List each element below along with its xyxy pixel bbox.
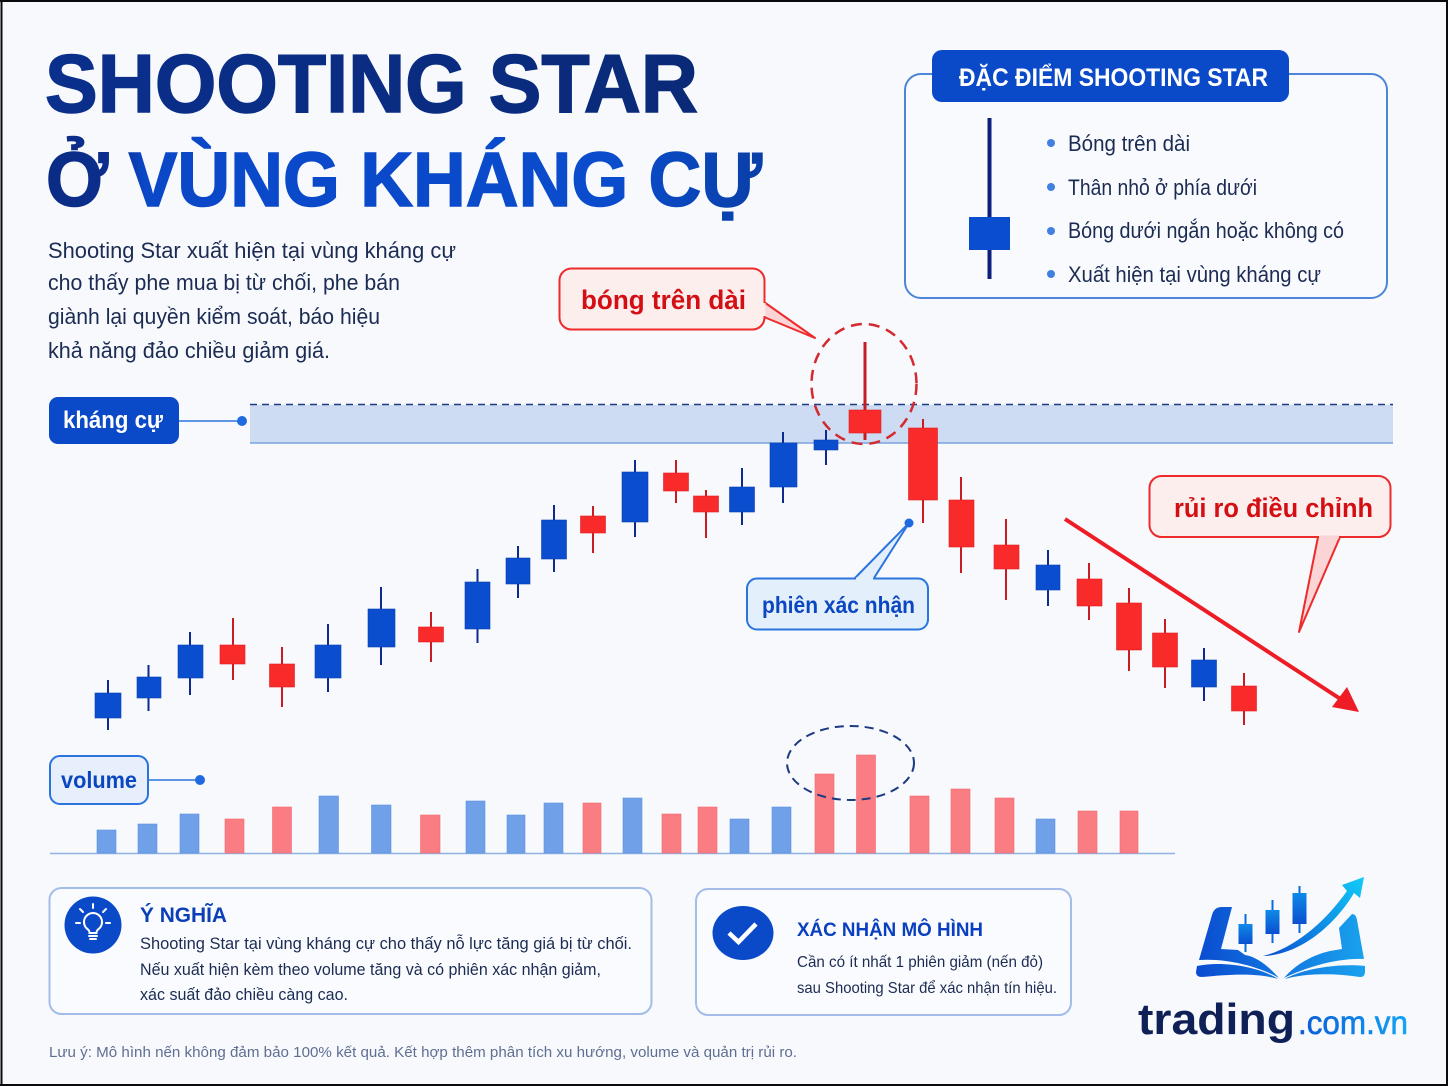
logo: trading.com.vn [1138,877,1408,1044]
heading: confirmation: XÁC NHẬN MÔ HÌNH [797,919,983,941]
intro paragraph: khả năng đảo chiều giảm giá. [48,338,330,363]
arrow: downward correction [1065,519,1359,712]
feature list: Bóng trên dài [1068,131,1190,156]
intro paragraph: giành lại quyền kiểm soát, báo hiệu [48,304,380,329]
intro paragraph [48,238,456,363]
feature list [1047,131,1344,287]
footnote: Lưu ý: Mô hình nến không đảm bảo 100% kết quả. Kết hợp thêm phân tích xu hướng, volume và quản trị rủi ro. [49,1044,797,1061]
panel heading [932,50,1289,102]
callout: confirmation session: phiên xác nhận [762,592,915,618]
label: resistance: kháng cự [63,407,164,434]
meaning text: Shooting Star tại vùng kháng cự cho thấy nỗ lực tăng giá bị từ chối. [140,934,632,953]
panel: meaning [50,888,652,1014]
title: SHOOTING STAR [45,37,698,130]
title: Ở VÙNG KHÁNG CỰ [46,136,762,223]
confirmation text: Cần có ít nhất 1 phiên giảm (nến đỏ) [797,954,1043,971]
feature list: Xuất hiện tại vùng kháng cự [1068,262,1321,287]
meaning text: xác suất đảo chiều càng cao. [140,985,348,1004]
resistance zone [250,404,1393,443]
intro paragraph: Shooting Star xuất hiện tại vùng kháng cự [48,238,456,263]
panel heading: ĐẶC ĐIỂM SHOOTING STAR [959,63,1268,92]
confirmation text [797,954,1057,997]
logo wordmark [1138,995,1408,1044]
label: resistance [49,397,247,444]
icon: check mark [712,906,774,960]
feature list: Thân nhỏ ở phía dưới [1068,175,1257,200]
callout: confirmation session [747,518,928,630]
callout: long upper shadow [560,268,815,338]
panel: pattern confirmation [696,889,1071,1015]
volume bar chart [50,755,1175,854]
candlestick chart [95,342,1256,730]
icon: shooting star candle [969,118,1010,279]
icon: logo candles [1238,886,1306,952]
label: volume [50,756,205,804]
intro paragraph: cho thấy phe mua bị từ chối, phe bán [48,270,400,295]
callout: correction risk [1150,476,1390,632]
title [45,37,762,223]
callout: correction risk: rủi ro điều chỉnh [1174,493,1373,523]
label: volume: volume [61,767,137,793]
heading: meaning: Ý NGHĨA [140,903,227,927]
icon: light bulb [64,896,122,954]
dashed ellipse around volume spike [787,726,914,800]
panel: shooting star characteristics [905,50,1387,298]
icon: open book [1196,907,1365,979]
feature list: Bóng dưới ngắn hoặc không có [1068,218,1344,243]
logo wordmark: trading [1138,995,1295,1044]
shooting star candle [849,342,881,440]
icon: logo rising arrow [1263,877,1364,956]
dashed circle around shooting star [812,324,916,444]
callout: long upper shadow: bóng trên dài [581,285,746,315]
confirmation text: sau Shooting Star để xác nhận tín hiệu. [797,979,1057,997]
meaning text [140,934,632,1004]
meaning text: Nếu xuất hiện kèm theo volume tăng và có phiên xác nhận giảm, [140,960,601,979]
logo wordmark: .com.vn [1298,1004,1408,1041]
